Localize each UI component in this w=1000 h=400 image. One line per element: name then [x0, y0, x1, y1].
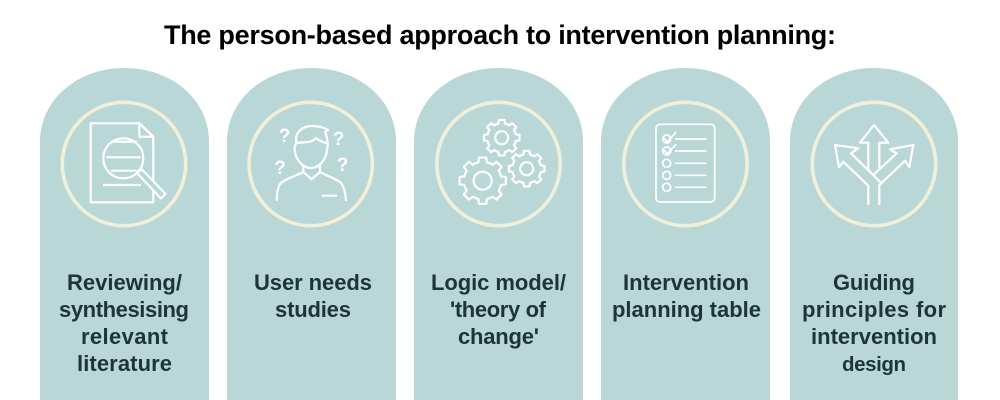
label: user needs [254, 270, 372, 322]
label: guiding principles: principles for [802, 297, 946, 322]
label: user needs: User needs [254, 270, 372, 295]
label: planning table: Intervention [623, 270, 749, 295]
icon ring: user needs [249, 102, 372, 226]
label: guiding principles: intervention [811, 324, 937, 349]
label: guiding principles: Guiding [833, 270, 915, 295]
label: reviewing: literature [77, 351, 172, 376]
icon: person with question marks [274, 126, 348, 200]
icon: question marks: ? [337, 155, 348, 176]
icon: question marks [274, 126, 348, 179]
icon: question marks: ? [333, 129, 344, 150]
label: logic model: Logic model/ [431, 270, 566, 295]
label: reviewing: relevant [81, 324, 169, 349]
label: guiding principles: design [842, 353, 906, 376]
label: reviewing [59, 270, 189, 376]
icon: three-way arrows [835, 125, 913, 204]
label: logic model: change' [458, 324, 539, 349]
icon ring: planning table [624, 102, 747, 226]
icon: question marks: ? [274, 158, 286, 179]
panel: guiding principles [790, 68, 958, 400]
icon ring: logic model [437, 102, 560, 226]
label: planning table [612, 270, 761, 322]
panel: user needs [227, 68, 396, 400]
icon: checklist [656, 124, 715, 202]
label: reviewing: synthesising [59, 297, 189, 322]
label: user needs: studies [275, 297, 351, 322]
label: reviewing: Reviewing/ [67, 270, 182, 295]
panel: reviewing literature [40, 68, 209, 400]
title: The person-based approach to intervention planning: [164, 20, 836, 50]
icon ring: guiding principles [812, 102, 936, 226]
label: logic model [431, 270, 566, 349]
panel: intervention planning table [601, 68, 770, 400]
label: logic model: 'theory of [450, 297, 547, 322]
label: planning table: planning table [612, 297, 761, 322]
panel: logic model [414, 68, 583, 400]
icon ring: reviewing [62, 102, 186, 226]
icon: document with magnifier [91, 123, 166, 202]
icon: gears [460, 120, 544, 204]
label: guiding principles [802, 270, 946, 376]
icon: question marks: ? [279, 126, 290, 147]
